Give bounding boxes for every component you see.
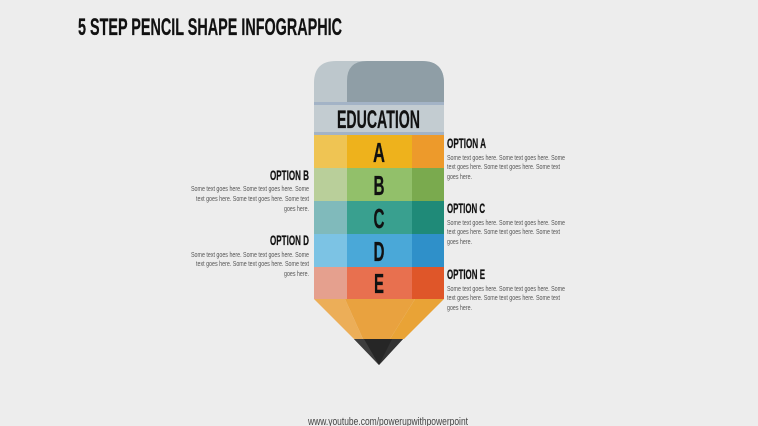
option D: text goes here. Some text goes here. Some text bbox=[196, 259, 309, 268]
segment C: C bbox=[374, 203, 385, 234]
ferrule band bbox=[314, 102, 444, 135]
segment C bbox=[314, 201, 444, 234]
label: education: EDUCATION bbox=[337, 106, 420, 134]
option A: text goes here. Some text goes here. Some text bbox=[447, 162, 560, 171]
option A: Some text goes here. Some text goes here. Some bbox=[447, 153, 565, 162]
option D: OPTION D bbox=[270, 232, 309, 248]
option D: goes here. bbox=[284, 269, 309, 278]
segment A: A bbox=[373, 137, 385, 168]
graphite tip bbox=[354, 339, 403, 365]
option C bbox=[447, 200, 565, 246]
option D: Some text goes here. Some text goes here. Some bbox=[191, 250, 309, 259]
segment E bbox=[314, 267, 444, 299]
option A bbox=[447, 135, 565, 181]
option E: Some text goes here. Some text goes here. Some bbox=[447, 284, 565, 293]
option D bbox=[191, 232, 309, 278]
option E: OPTION E bbox=[447, 266, 485, 282]
segment E: E bbox=[374, 268, 384, 299]
option C: OPTION C bbox=[447, 200, 485, 216]
segment B: B bbox=[374, 170, 384, 201]
option B: goes here. bbox=[284, 204, 309, 213]
segment D: D bbox=[374, 236, 384, 267]
pencil bbox=[314, 61, 444, 365]
title: 5 STEP PENCIL SHAPE INFOGRAPHIC bbox=[78, 14, 342, 41]
segment A bbox=[314, 135, 444, 168]
option B: text goes here. Some text goes here. Some text bbox=[196, 194, 309, 203]
pencil cone bbox=[314, 299, 444, 339]
option C: Some text goes here. Some text goes here. Some bbox=[447, 218, 565, 227]
option E: goes here. bbox=[447, 303, 472, 312]
segment D bbox=[314, 234, 444, 267]
option E bbox=[447, 266, 565, 312]
option C: goes here. bbox=[447, 237, 472, 246]
option B bbox=[191, 167, 309, 213]
segment B bbox=[314, 168, 444, 201]
option C: text goes here. Some text goes here. Some text bbox=[447, 227, 560, 236]
option E: text goes here. Some text goes here. Some text bbox=[447, 293, 560, 302]
option B: Some text goes here. Some text goes here. Some bbox=[191, 184, 309, 193]
option A: OPTION A bbox=[447, 135, 486, 151]
eraser bbox=[314, 61, 444, 102]
option B: OPTION B bbox=[270, 167, 309, 183]
option A: goes here. bbox=[447, 172, 472, 181]
